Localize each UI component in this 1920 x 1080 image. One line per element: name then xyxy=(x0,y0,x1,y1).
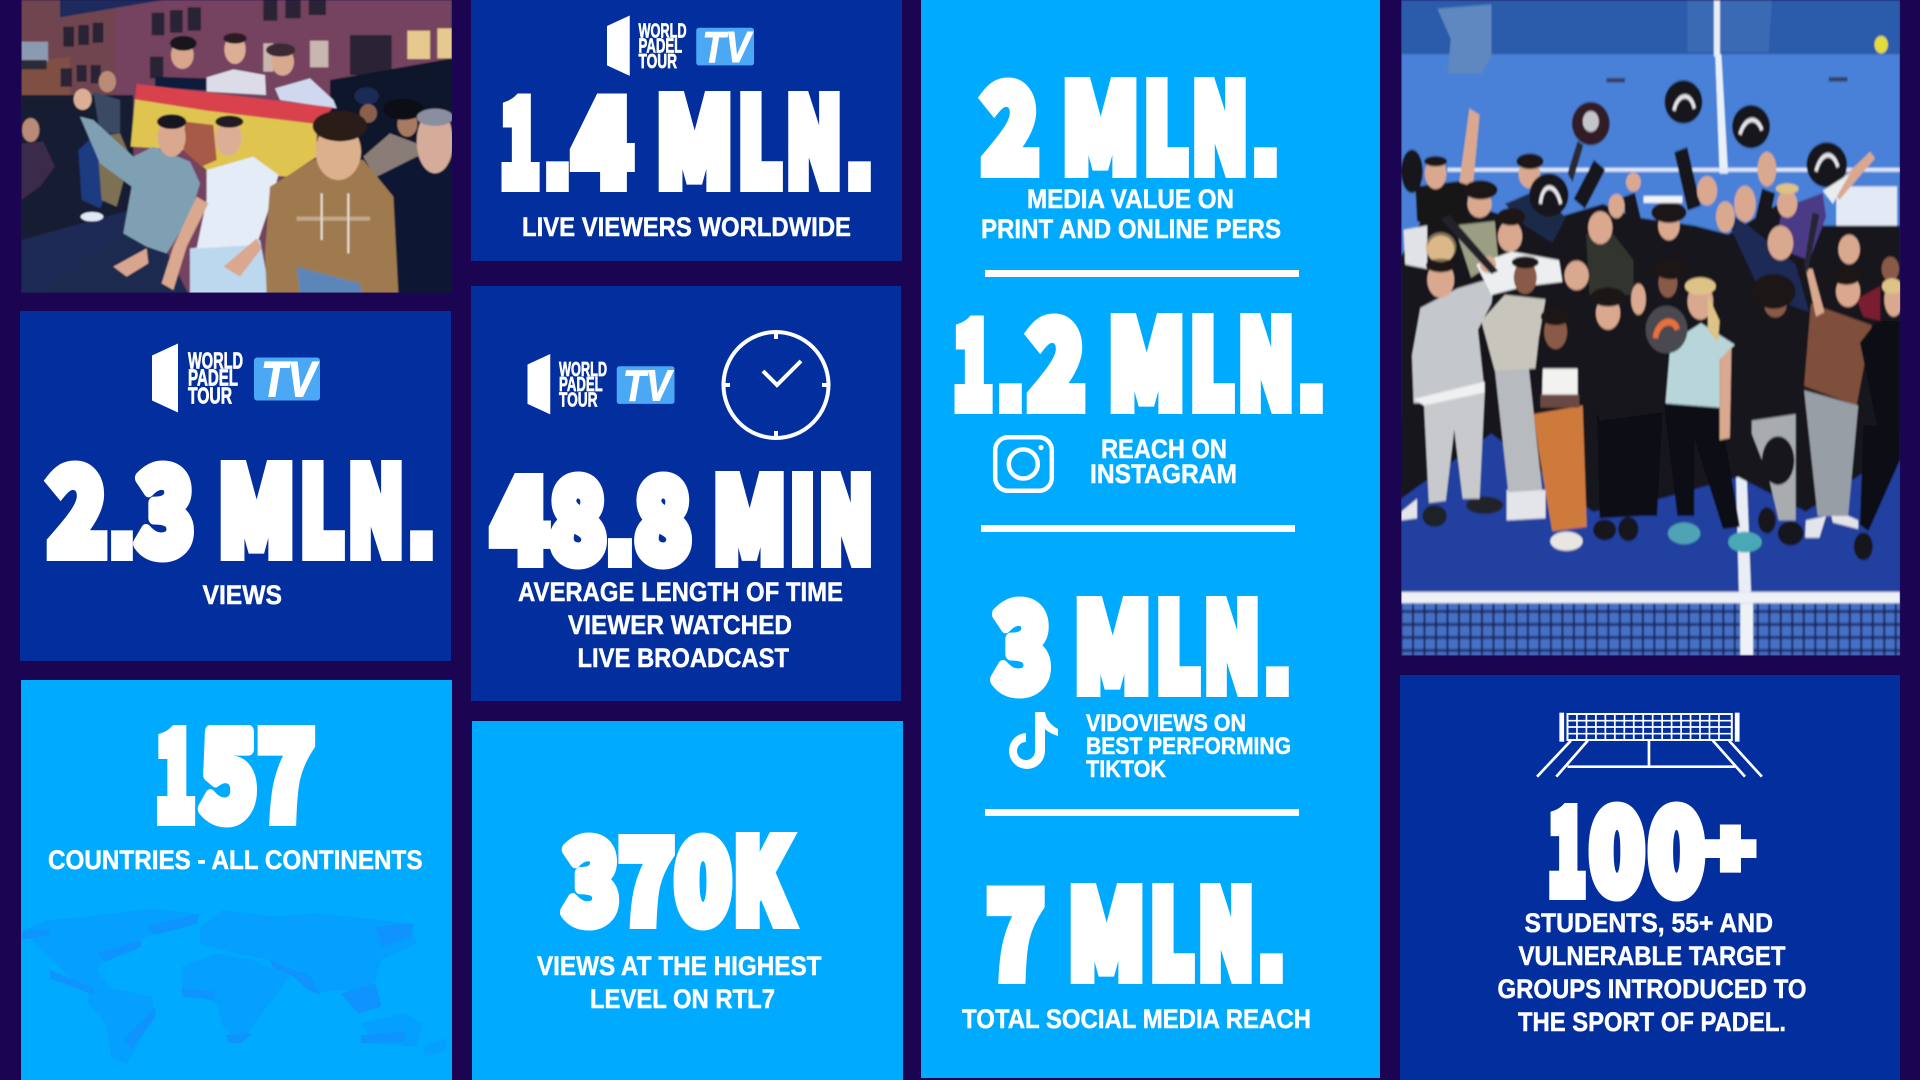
logo: World Padel Tour TV: TV xyxy=(623,361,674,410)
icon: clock with check xyxy=(723,332,829,438)
caption: TikTok views xyxy=(1086,710,1291,783)
panel: 157 countries xyxy=(21,680,452,1080)
statistic: 3 million: M xyxy=(1074,554,1151,724)
logo: World Padel Tour TV: PADEL xyxy=(559,374,603,396)
caption: TikTok views: VIDOVIEWS ON xyxy=(1086,710,1246,737)
statistic: 1.2 million: . xyxy=(998,302,1023,434)
world map xyxy=(22,908,446,1065)
statistic: 2 million: 2 xyxy=(982,34,1039,206)
statistic: 7 million: N xyxy=(1198,840,1254,1012)
caption: Instagram reach xyxy=(1090,434,1237,489)
caption: LEVEL ON RTL7 xyxy=(590,984,775,1014)
caption: AVERAGE LENGTH OF TIME xyxy=(518,577,843,607)
statistic: 2 million: . xyxy=(1253,66,1278,198)
caption: GROUPS INTRODUCED TO xyxy=(1498,974,1806,1004)
statistic: N xyxy=(786,48,842,220)
statistic: 2 million: L xyxy=(1144,34,1188,206)
caption: VULNERABLE TARGET xyxy=(1518,941,1786,971)
caption: COUNTRIES - ALL CONTINENTS xyxy=(48,845,422,875)
statistic: I xyxy=(790,430,815,594)
statistic: 2 million: N xyxy=(1192,34,1248,206)
statistic: . xyxy=(847,80,872,212)
caption: THE SPORT OF PADEL. xyxy=(1518,1007,1786,1037)
statistic: N xyxy=(819,430,873,594)
panel: 48.8 minutes watched xyxy=(471,286,901,701)
statistic: 0 xyxy=(1649,762,1704,926)
caption: LIVE BROADCAST xyxy=(578,643,789,673)
statistic: 5 xyxy=(200,682,257,854)
statistic: 1.2 million: L xyxy=(1190,270,1234,442)
caption: STUDENTS, 55+ AND xyxy=(1524,908,1773,938)
caption: TikTok views: BEST PERFORMING xyxy=(1086,733,1291,760)
panel: social and media reach xyxy=(921,0,1380,1078)
logo: World Padel Tour TV xyxy=(152,344,320,412)
statistic: 4 xyxy=(492,430,548,594)
statistic: 8 xyxy=(550,430,606,594)
statistic: M xyxy=(656,48,733,220)
logo: World Padel Tour TV: TOUR xyxy=(559,390,598,412)
caption: Instagram reach: REACH ON xyxy=(1101,434,1227,464)
logo: World Padel Tour TV: WORLD xyxy=(559,359,607,381)
caption: LIVE VIEWERS WORLDWIDE xyxy=(522,212,851,242)
logo: World Padel Tour TV: TV xyxy=(261,352,319,408)
statistic: 2 million: M xyxy=(1062,34,1139,206)
statistic: N xyxy=(348,418,404,588)
logo: World Padel Tour TV: PADEL xyxy=(638,35,682,57)
photo: group on padel court xyxy=(1401,0,1903,656)
statistic: 4 xyxy=(573,48,632,220)
caption: VIEWER WATCHED xyxy=(568,610,792,640)
panel: 2.3 million views xyxy=(20,311,451,661)
statistic: 1.2 million: 2 xyxy=(1028,270,1085,442)
statistic: 0 xyxy=(675,792,731,956)
statistic: L xyxy=(738,48,782,220)
statistic: 1 xyxy=(500,48,540,220)
logo: World Padel Tour TV: TOUR xyxy=(638,51,677,73)
logo: World Padel Tour TV xyxy=(607,16,754,76)
statistic: 2 xyxy=(48,418,107,588)
statistic: K xyxy=(734,792,792,956)
caption xyxy=(537,951,822,1014)
statistic: 3 million: . xyxy=(1265,584,1290,716)
statistic: M xyxy=(713,430,786,594)
caption: total social reach: TOTAL SOCIAL MEDIA REACH xyxy=(962,1004,1311,1034)
statistic: 1.2 million: 1 xyxy=(953,270,993,442)
statistic: 8 xyxy=(635,430,691,594)
statistic: . xyxy=(110,448,134,580)
statistic: 3 xyxy=(563,792,619,956)
statistic: 3 xyxy=(136,418,194,588)
statistic: 1.2 million: N xyxy=(1238,270,1294,442)
logo: World Padel Tour TV: TV xyxy=(702,23,754,72)
panel: 100+ target groups introduced xyxy=(1400,675,1900,1080)
statistic: 7 million: L xyxy=(1150,840,1194,1012)
logo: World Padel Tour TV xyxy=(528,354,674,414)
panel: 370K RTL7 views xyxy=(472,721,903,1080)
statistic: 7 million: . xyxy=(1259,872,1284,1004)
panel: 1.4 million live viewers xyxy=(471,0,902,261)
statistic: 1 xyxy=(156,682,196,854)
statistic: 1.2 million: M xyxy=(1108,270,1185,442)
statistic: 7 million: 7 xyxy=(987,840,1044,1012)
photo: fans with Spanish flag xyxy=(21,0,453,293)
statistic: . xyxy=(545,80,570,212)
statistic: 0 xyxy=(1590,762,1644,926)
statistic: 3 million: L xyxy=(1156,554,1200,724)
statistic: 3 million: N xyxy=(1204,554,1260,724)
statistic: M xyxy=(218,418,295,588)
logo: World Padel Tour TV: PADEL xyxy=(188,364,238,390)
statistic: 1 xyxy=(1548,762,1586,926)
caption: media value: PRINT AND ONLINE PERS xyxy=(981,214,1281,244)
icon: Instagram xyxy=(995,437,1052,491)
statistic: 3 million: 3 xyxy=(993,554,1051,724)
statistic: . xyxy=(409,448,434,580)
caption: media value xyxy=(981,184,1281,244)
caption: VIEWS xyxy=(202,580,282,610)
statistic: L xyxy=(300,418,344,588)
caption: media value: MEDIA VALUE ON xyxy=(1027,184,1234,214)
caption: TikTok views: TIKTOK xyxy=(1086,756,1166,783)
statistic: + xyxy=(1707,795,1754,896)
caption xyxy=(518,577,843,673)
logo: World Padel Tour TV: TOUR xyxy=(188,382,232,408)
icon: padel net and court xyxy=(1537,713,1762,777)
logo: World Padel Tour TV: WORLD xyxy=(188,348,243,374)
statistic: 1.2 million: . xyxy=(1299,302,1324,434)
caption xyxy=(1498,908,1806,1037)
statistic: 7 xyxy=(258,682,314,854)
statistic: . xyxy=(607,460,633,586)
caption: VIEWS AT THE HIGHEST xyxy=(537,951,822,981)
logo: World Padel Tour TV: WORLD xyxy=(638,20,687,42)
statistic: 7 million: M xyxy=(1068,840,1145,1012)
icon: TikTok xyxy=(1009,712,1058,769)
caption: Instagram reach: INSTAGRAM xyxy=(1090,459,1237,489)
statistic: 7 xyxy=(619,792,674,956)
